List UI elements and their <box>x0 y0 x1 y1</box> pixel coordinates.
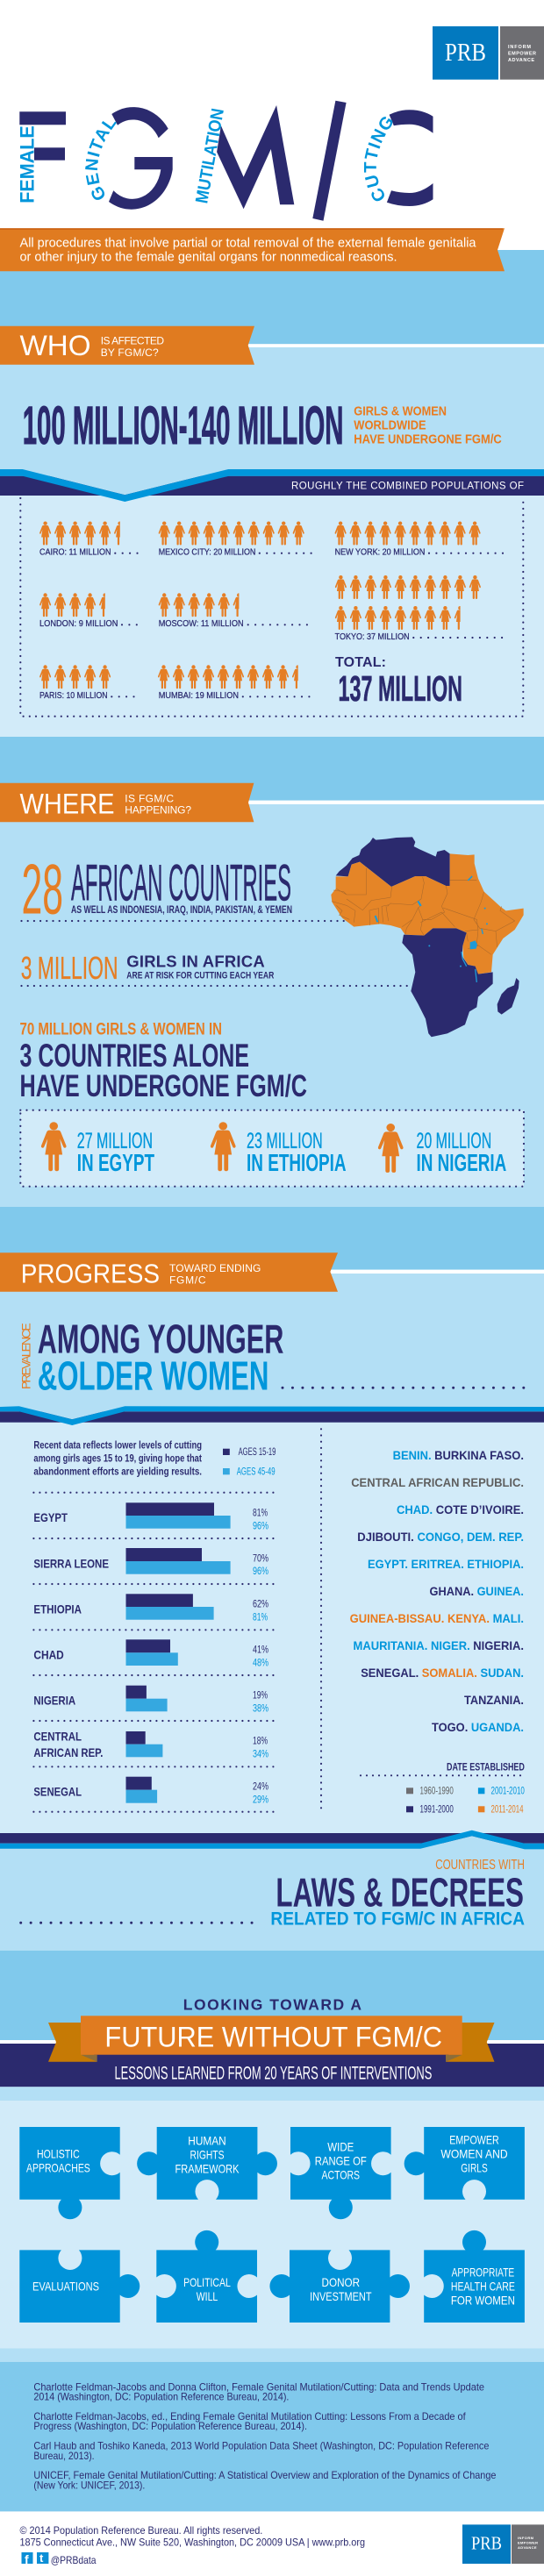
ribbon: future without FGM/C <box>81 2016 462 2055</box>
list: countries with laws and decrees <box>350 1448 524 1734</box>
list: countries with laws and decrees: TANZANIA. <box>464 1693 524 1707</box>
piece: evaluations <box>19 2250 140 2323</box>
piece: human rights framework: HUMAN <box>188 2133 226 2147</box>
bar row: Egypt: EGYPT <box>33 1510 68 1524</box>
heading: prevalence among younger and older women <box>19 1317 524 1398</box>
logo: PRB top <box>433 26 544 80</box>
heading: prevalence among younger and older women: &OLDER WOMEN <box>38 1352 268 1398</box>
pictogram: Paris <box>39 665 111 689</box>
stat: 28 African countries: AS WELL AS INDONESIA, IRAQ, INDIA, PAKISTAN, & YEMEN <box>71 903 292 916</box>
label: Paris: PARIS: 10 MILLION <box>39 690 108 701</box>
logo: PRB footer: PRB <box>471 2533 502 2554</box>
bar row: Chad <box>33 1639 268 1668</box>
piece: empower women and girls: WOMEN AND <box>440 2147 508 2161</box>
bar row: Ethiopia: 81% <box>253 1610 268 1623</box>
section ribbon: WHO: BY FGM/C? <box>101 346 159 359</box>
logo: PRB top: EMPOWER <box>508 51 536 56</box>
bar row: Nigeria: 19% <box>253 1688 268 1701</box>
letter F <box>19 111 66 161</box>
section ribbon: WHERE: IS FGM/C <box>125 792 174 804</box>
bar row: Senegal: 29% <box>253 1794 268 1806</box>
piece: appropriate health care for women: HEALTH CARE <box>451 2280 515 2294</box>
text: Ethiopia: 23 MILLION <box>247 1129 323 1153</box>
bar row: Sierra Leone <box>33 1548 268 1577</box>
heading: prevalence among younger and older women: PREVALENCE <box>19 1323 33 1389</box>
label: Mumbai: MUMBAI: 19 MILLION <box>159 690 239 701</box>
bar row: Central African Republic: 18% <box>253 1734 268 1746</box>
piece: holistic approaches: HOLISTIC <box>37 2147 80 2161</box>
label: Moscow: MOSCOW: 11 MILLION <box>159 618 244 629</box>
legend: ages: AGES 45-49 <box>237 1466 276 1477</box>
bar row: Ethiopia <box>33 1594 268 1623</box>
logo: PRB top: ADVANCE <box>508 58 534 63</box>
chart intro text: Recent data reflects lower levels of cutting <box>33 1441 202 1452</box>
label: Mexico City: MEXICO CITY: 20 MILLION <box>159 546 255 557</box>
stat: 3 million girls: ARE AT RISK FOR CUTTING EACH YEAR <box>126 971 274 981</box>
section ribbon: PROGRESS <box>0 1252 338 1292</box>
title: FGM/C <box>16 100 433 221</box>
chart intro text: abandonment efforts are yielding results. <box>33 1466 202 1477</box>
heading: looking toward a future: FUTURE WITHOUT FGM/C <box>104 2021 442 2052</box>
bar row: Chad: 41% <box>253 1643 268 1655</box>
icon: facebook <box>21 2552 33 2566</box>
text: Ethiopia <box>247 1129 347 1176</box>
piece: human rights framework <box>137 2127 277 2200</box>
list: countries with laws and decrees: TOGO. UGANDA. <box>432 1720 524 1734</box>
list: countries with laws and decrees: CHAD. COTE D’IVOIRE. <box>397 1502 524 1516</box>
heading: laws and decrees <box>21 1858 525 1930</box>
icon: facebook: f <box>25 2552 29 2566</box>
icon: woman Egypt <box>41 1122 67 1171</box>
references <box>33 2380 497 2491</box>
icon: woman Ethiopia <box>211 1122 236 1171</box>
chart intro text: among girls ages 15 to 19, giving hope that <box>33 1454 202 1465</box>
pictogram: Mexico City <box>159 521 304 546</box>
panel: prevalence chart <box>33 1441 276 1812</box>
callout: girls and women worldwide: GIRLS & WOMEN <box>354 404 447 418</box>
logo: PRB footer: EMPOWER <box>518 2540 538 2545</box>
heading: laws and decrees: RELATED TO FGM/C IN AFRICA <box>270 1909 525 1930</box>
references: Carl Haub and Toshiko Kaneda, 2013 World Population Data Sheet (Washington, DC: Population Reference <box>33 2440 490 2452</box>
panel: city populations <box>20 498 523 717</box>
piece: appropriate health care for women: FOR WOMEN <box>451 2294 515 2308</box>
ribbon folds <box>81 2055 462 2062</box>
text: Egypt: 27 MILLION <box>77 1129 153 1153</box>
footer text: @PRBdata <box>51 2554 97 2566</box>
letter C <box>387 110 433 206</box>
list: countries with laws and decrees: GUINEA-BISSAU. KENYA. MALI. <box>350 1611 524 1625</box>
legend: date established: 1991-2000 <box>419 1805 454 1816</box>
bar row: Central African Republic: 34% <box>253 1747 268 1759</box>
section ribbon: WHERE: HAPPENING? <box>125 804 191 817</box>
stat: 70 million in 3 countries: HAVE UNDERGONE FGM/C <box>19 1069 307 1103</box>
piece: appropriate health care for women: APPROPRIATE <box>452 2265 514 2279</box>
bar row: Ethiopia: ETHIOPIA <box>33 1602 82 1616</box>
bar row: Central African Republic: CENTRAL <box>33 1729 82 1743</box>
callout: girls and women worldwide: HAVE UNDERGONE FGM/C <box>354 432 502 446</box>
piece: wide range of actors: ACTORS <box>322 2168 360 2182</box>
section ribbon: WHO: WHO <box>19 330 91 361</box>
piece: empower women and girls: GIRLS <box>461 2161 488 2175</box>
list: countries with laws and decrees: EGYPT. ERITREA. ETHIOPIA. <box>368 1557 524 1571</box>
stat: 70 million in 3 countries: 70 MILLION GIRLS & WOMEN IN <box>19 1020 222 1038</box>
total: TOTAL: <box>335 655 386 670</box>
piece: donor investment <box>269 2250 410 2323</box>
stat: 70 million in 3 countries: 3 COUNTRIES ALONE <box>19 1038 249 1074</box>
bar row: Sierra Leone: 70% <box>253 1552 268 1564</box>
bar row: Chad: 48% <box>253 1656 268 1668</box>
piece: appropriate health care for women <box>424 2230 525 2323</box>
piece: donor investment: INVESTMENT <box>310 2289 372 2303</box>
icon: twitter: t <box>39 2551 44 2565</box>
legend: date established: DATE ESTABLISHED <box>447 1762 525 1773</box>
section ribbon: WHERE: WHERE <box>19 788 114 819</box>
bar row: Nigeria <box>33 1686 268 1714</box>
bar row: Central African Republic: AFRICAN REP. <box>33 1745 103 1759</box>
list: countries with laws and decrees: SENEGAL. SOMALIA. SUDAN. <box>361 1666 524 1680</box>
callout: girls and women worldwide: WORLDWIDE <box>354 418 426 432</box>
puzzle: lessons learned <box>19 2127 525 2323</box>
list: countries with laws and decrees: CENTRAL AFRICAN REPUBLIC. <box>351 1475 524 1489</box>
bar row: Chad: CHAD <box>33 1648 64 1662</box>
logo: PRB top: INFORM <box>508 45 531 50</box>
section ribbon: WHO: IS AFFECTED <box>101 335 164 347</box>
footer text <box>19 2524 365 2566</box>
bar row: Sierra Leone: 96% <box>253 1565 268 1577</box>
piece: holistic approaches: APPROACHES <box>26 2161 90 2175</box>
label: GENITAL: GENITAL <box>85 121 117 200</box>
stat: 3 million girls <box>21 950 408 986</box>
logo: PRB top: PRB <box>445 39 486 67</box>
map: Africa <box>331 837 524 1037</box>
list: countries with laws and decrees: DJIBOUTI. CONGO, DEM. REP. <box>357 1530 524 1544</box>
legend: date established: 1960-1990 <box>419 1787 454 1797</box>
list: countries with laws and decrees: GHANA. GUINEA. <box>430 1584 524 1598</box>
label: New York: NEW YORK: 20 MILLION <box>335 546 425 557</box>
definition ribbon <box>0 228 505 271</box>
section ribbon: PROGRESS: PROGRESS <box>21 1259 160 1289</box>
bar row: Ethiopia: 62% <box>253 1597 268 1609</box>
bar row: Nigeria: NIGERIA <box>33 1694 75 1708</box>
bar row: Central African Republic <box>33 1729 268 1759</box>
references: Charlotte Feldman-Jacobs, ed., Ending Female Genital Mutilation Cutting: Lessons From a Decade of <box>33 2410 466 2423</box>
piece: human rights framework: RIGHTS <box>190 2148 225 2162</box>
legend: ages: AGES 15-19 <box>239 1447 276 1458</box>
pictogram: Tokyo <box>335 575 481 630</box>
label: Cairo: CAIRO: 11 MILLION <box>39 546 111 557</box>
heading: prevalence among younger and older women: AMONG YOUNGER <box>38 1317 283 1362</box>
bar row: Nigeria: 38% <box>253 1702 268 1714</box>
total <box>335 655 462 709</box>
pictogram: Mumbai <box>158 665 304 689</box>
definition ribbon: or other injury to the female genital organs for nonmedical reasons. <box>19 250 397 265</box>
bar row: Egypt: 96% <box>253 1519 268 1531</box>
pictogram: Cairo <box>39 521 125 546</box>
piece: political will <box>156 2230 257 2323</box>
icon: twitter <box>37 2551 48 2565</box>
text: Egypt <box>77 1129 154 1176</box>
letter G <box>109 107 173 210</box>
references: Charlotte Feldman-Jacobs and Donna Clifton, Female Genital Mutilation/Cutting: Data and Trends Update <box>33 2380 484 2393</box>
heading: looking toward a future: LOOKING TOWARD A <box>183 1996 361 2014</box>
legend: date established: 2011-2014 <box>491 1805 524 1816</box>
list: countries with laws and decrees: BENIN. BURKINA FASO. <box>393 1448 524 1462</box>
text: Ethiopia: IN ETHIOPIA <box>247 1149 347 1176</box>
piece: empower women and girls: EMPOWER <box>449 2133 499 2147</box>
section ribbon: PROGRESS: TOWARD ENDING <box>169 1262 261 1274</box>
piece: holistic approaches <box>19 2127 120 2219</box>
text: Nigeria <box>416 1129 506 1176</box>
heading: looking toward a future <box>48 1996 495 2084</box>
chevron band: prevalence panel top <box>0 1406 544 1425</box>
text: Egypt: IN EGYPT <box>77 1149 154 1176</box>
references: 2014 (Washington, DC: Population Reference Bureau, 2014). <box>33 2391 289 2403</box>
label: CUTTING: CUTTING <box>364 117 393 202</box>
stat: 70 million in 3 countries <box>19 1020 307 1103</box>
chevron band: laws <box>0 1830 544 1849</box>
chart intro text <box>33 1441 202 1477</box>
section ribbon: WHERE <box>0 783 254 822</box>
stat: 3 million girls: GIRLS IN AFRICA <box>126 953 265 971</box>
callout: girls and women worldwide <box>354 404 502 446</box>
logo: PRB footer <box>462 2524 544 2564</box>
piece: political will: POLITICAL <box>183 2275 231 2289</box>
footer text: 1875 Connecticut Ave., NW Suite 520, Washington, DC 20009 USA | www.prb.org <box>19 2537 365 2549</box>
legend: date established <box>361 1762 525 1816</box>
piece: evaluations: EVALUATIONS <box>32 2279 99 2293</box>
piece: wide range of actors <box>290 2127 391 2219</box>
footer text: © 2014 Population Reference Bureau. All rights reserved. <box>19 2524 262 2537</box>
bar row: Senegal: 24% <box>253 1780 268 1793</box>
piece: donor investment: DONOR <box>322 2275 360 2289</box>
chevron band: combined populations <box>0 469 544 502</box>
pictogram: London <box>39 593 111 617</box>
references: (New York: UNICEF, 2013). <box>33 2479 145 2491</box>
bar row: Egypt <box>33 1502 268 1531</box>
label: London: LONDON: 9 MILLION <box>39 618 118 629</box>
label: Tokyo: TOKYO: 37 MILLION <box>335 632 410 642</box>
logo: PRB footer: INFORM <box>518 2536 534 2540</box>
label: FEMALE: FEMALE <box>16 125 38 203</box>
bar row: Senegal <box>33 1777 268 1806</box>
ribbon tails <box>48 2023 495 2062</box>
list: countries with laws and decrees: MAURITANIA. NIGER. NIGERIA. <box>353 1638 524 1652</box>
stat: 3 million girls: 3 MILLION <box>21 950 118 986</box>
piece: political will: WILL <box>197 2289 218 2303</box>
stat: 28 African countries: 28 <box>21 851 63 930</box>
piece: wide range of actors: WIDE <box>327 2139 354 2153</box>
panel: three countries <box>20 1110 524 1187</box>
pictogram: New York <box>335 521 481 546</box>
slash <box>312 101 347 221</box>
references: Bureau, 2013). <box>33 2450 95 2462</box>
piece: wide range of actors: RANGE OF <box>315 2154 367 2168</box>
definition ribbon: All procedures that involve partial or total removal of the external female genitalia <box>19 236 476 251</box>
references: Progress (Washington, DC: Population Reference Bureau, 2014). <box>33 2420 307 2432</box>
text: Nigeria: IN NIGERIA <box>416 1149 506 1176</box>
legend: ages <box>223 1447 276 1477</box>
legend: date established: 2001-2010 <box>491 1787 525 1797</box>
letter M <box>217 105 294 209</box>
piece: human rights framework: FRAMEWORK <box>175 2162 240 2176</box>
text: Nigeria: 20 MILLION <box>416 1129 491 1153</box>
piece: empower women and girls <box>404 2127 525 2200</box>
section ribbon: PROGRESS: FGM/C <box>169 1274 206 1286</box>
chevron band: combined populations: ROUGHLY THE COMBINED POPULATIONS OF <box>291 481 524 491</box>
stat: 28 African countries <box>21 851 346 930</box>
bar row: Egypt: 81% <box>253 1506 268 1518</box>
pictogram: Moscow <box>159 593 245 617</box>
bar row: Sierra Leone: SIERRA LEONE <box>33 1556 109 1570</box>
logo: PRB footer: ADVANCE <box>518 2545 537 2550</box>
label: MUTILATION: MUTILATION <box>192 107 228 205</box>
icon: woman Nigeria <box>378 1124 404 1173</box>
references: UNICEF, Female Genital Mutilation/Cutting: A Statistical Overview and Exploration of the Dynamics of Change <box>33 2469 497 2481</box>
section ribbon: WHO <box>0 326 254 365</box>
bar row: Senegal: SENEGAL <box>33 1785 82 1799</box>
